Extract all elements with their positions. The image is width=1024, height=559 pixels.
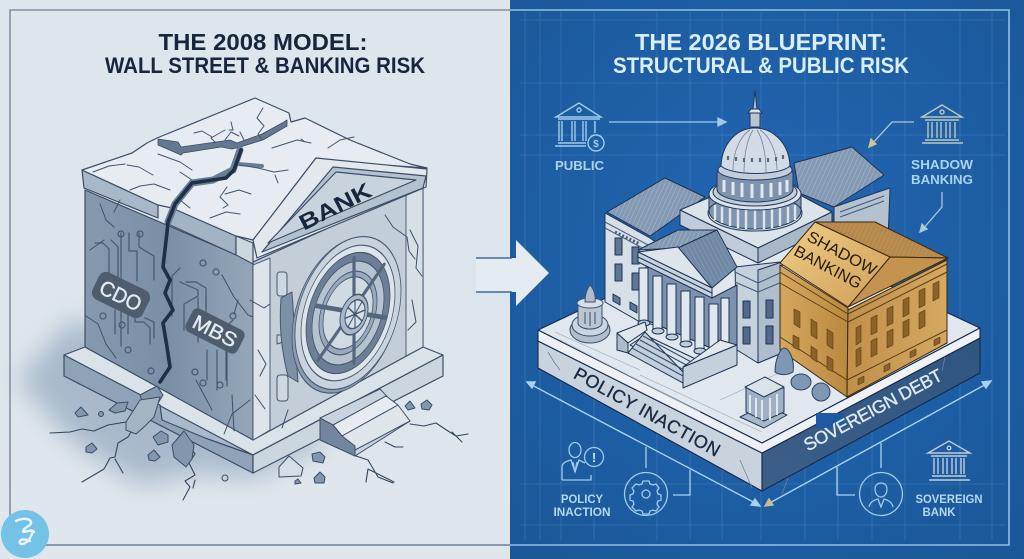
label: shadow banking roof [791, 229, 880, 293]
arrow: policy inaction span [527, 382, 760, 506]
label: policy inaction: POLICY [561, 494, 603, 506]
gold building windows [793, 281, 940, 385]
label: policy inaction: INACTION [554, 507, 610, 519]
central crack [160, 150, 262, 382]
vault roof slab side [82, 170, 253, 264]
icon: policy official alert [562, 442, 604, 480]
arrow: shadow banking to gold building [920, 192, 942, 232]
arrow: public to capitol [609, 118, 726, 126]
icon: public bank: $ [593, 139, 599, 150]
icon: sovereign official [860, 472, 902, 516]
vault base plinth [64, 347, 443, 473]
rubble stones [75, 386, 432, 484]
arrow: shadow banking to capitol [869, 122, 914, 147]
heading: 2026 blueprint: STRUCTURAL & PUBLIC RISK [613, 53, 909, 78]
main roof crack [158, 120, 287, 155]
label: shadow banking: SHADOW [911, 158, 973, 172]
wall hairline cracks [86, 204, 422, 434]
label: MBS: MBS [189, 311, 240, 352]
small kiosk [740, 377, 787, 428]
label: sovereign bank: BANK [922, 505, 956, 519]
icon: gear [624, 472, 668, 516]
gold roof plate [780, 222, 890, 307]
label: shadow banking roof: SHADOW [804, 229, 880, 280]
label: public: PUBLIC [555, 159, 604, 173]
heading: 2008 model [105, 29, 425, 78]
illustration: cracked bank vault [50, 98, 468, 500]
connector: gear to policy span [646, 447, 690, 495]
label: MBS [183, 306, 247, 356]
vault roof top surface [82, 98, 427, 240]
label: shadow banking: BANKING [911, 173, 973, 187]
icon: shadow bank [922, 105, 963, 143]
label: policy inaction [554, 494, 610, 519]
heading: 2008 model: THE 2008 MODEL: [158, 29, 368, 55]
label: sovereign bank: SOVEREIGN [916, 492, 982, 506]
vault right face [253, 185, 423, 440]
label: sovereign debt slab: SOVEREIGN DEBT [800, 365, 946, 455]
heading: 2008 model: WALL STREET & BANKING RISK [105, 53, 425, 78]
label: policy inaction slab: POLICY INACTION [570, 363, 724, 461]
icon: logo badge [1, 510, 49, 558]
label: shadow banking roof: BANKING [791, 243, 864, 293]
capitol portico [638, 230, 737, 361]
panel: 2008 model [0, 0, 511, 559]
arrow: transition 2008 to 2026 [476, 240, 549, 306]
vault ground shadow [18, 320, 330, 485]
central terrace [680, 195, 832, 263]
label: CDO [89, 269, 153, 321]
platform [538, 225, 980, 494]
panel: 2026 blueprint [510, 0, 1024, 559]
shrubs [775, 348, 830, 401]
icon: sovereign bank [928, 441, 970, 480]
label: shadow banking [911, 158, 973, 187]
shadow banking gold building [780, 222, 948, 397]
round vault door [292, 218, 401, 412]
rear wing [794, 147, 890, 260]
connector: official to debt span [837, 443, 881, 495]
vault left face [85, 190, 253, 440]
heading: 2026 blueprint: THE 2026 BLUEPRINT: [635, 29, 887, 55]
portico steps [617, 322, 737, 388]
portico columns [639, 268, 729, 357]
ground cracks [50, 420, 468, 500]
heading: 2026 blueprint [613, 29, 909, 78]
capitol right block [735, 262, 782, 363]
label: sovereign bank [916, 492, 982, 519]
arrow: sovereign debt span [765, 381, 991, 506]
circuit traces [95, 231, 236, 390]
vault steps [320, 389, 410, 456]
left wing [605, 178, 705, 330]
roof hairline cracks [93, 108, 354, 218]
monument statue [570, 285, 610, 343]
label: BANK: BANK [295, 178, 376, 235]
capitol dome [708, 91, 802, 231]
capitol illustration on platform [538, 91, 980, 494]
vault door hinge [277, 272, 298, 401]
label: CDO: CDO [96, 276, 145, 316]
bank pediment [253, 158, 427, 258]
icon: public bank [555, 103, 604, 151]
icon: policy official alert: ! [592, 450, 596, 465]
